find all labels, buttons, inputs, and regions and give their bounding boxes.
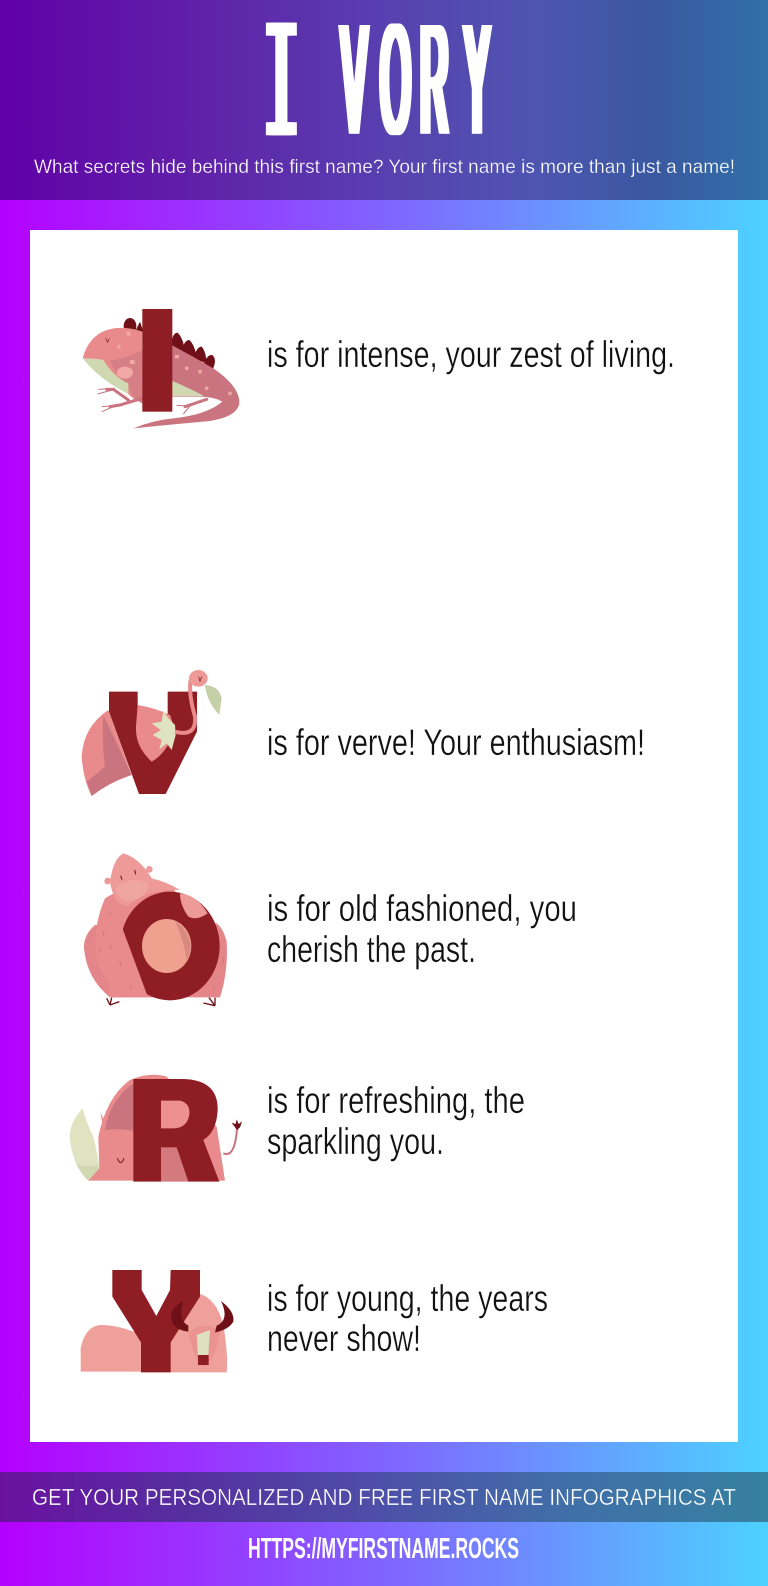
text: Y bbox=[267, 1278, 548, 1359]
icon: iguana letter I bbox=[83, 309, 239, 428]
title bbox=[260, 0, 492, 188]
text: R: sparkling you. bbox=[267, 1121, 444, 1162]
text: R: is for refreshing, the bbox=[267, 1080, 525, 1121]
text: Y: never show! bbox=[267, 1318, 421, 1359]
website url: HTTPS://MYFIRSTNAME.ROCKS bbox=[248, 1533, 519, 1565]
text: Y: is for young, the years bbox=[267, 1278, 548, 1319]
icon: vulture letter V bbox=[82, 670, 222, 796]
icon: gorilla letter O bbox=[84, 853, 227, 1006]
text: R bbox=[267, 1080, 525, 1162]
text: O: cherish the past. bbox=[267, 929, 476, 970]
text: V: is for verve! Your enthusiasm! bbox=[267, 722, 645, 763]
row Y: yak illustration and text bbox=[81, 1270, 548, 1372]
subtitle: What secrets hide behind this first name? Your first name is more than just a name! bbox=[34, 156, 735, 178]
icon: rhino letter R bbox=[70, 1075, 242, 1182]
row I: iguana illustration and text bbox=[83, 309, 675, 428]
white content panel bbox=[30, 230, 738, 1442]
header band bbox=[0, 0, 768, 200]
icon: yak letter Y bbox=[81, 1270, 234, 1372]
title: I bbox=[260, 0, 296, 188]
row R: rhino illustration and text bbox=[70, 1075, 525, 1182]
text: O: is for old fashioned, you bbox=[267, 888, 577, 929]
row O: gorilla illustration and text bbox=[84, 853, 577, 1006]
text: O bbox=[267, 888, 577, 970]
footer band bbox=[0, 1472, 768, 1522]
row V: vulture illustration and text bbox=[82, 670, 645, 796]
